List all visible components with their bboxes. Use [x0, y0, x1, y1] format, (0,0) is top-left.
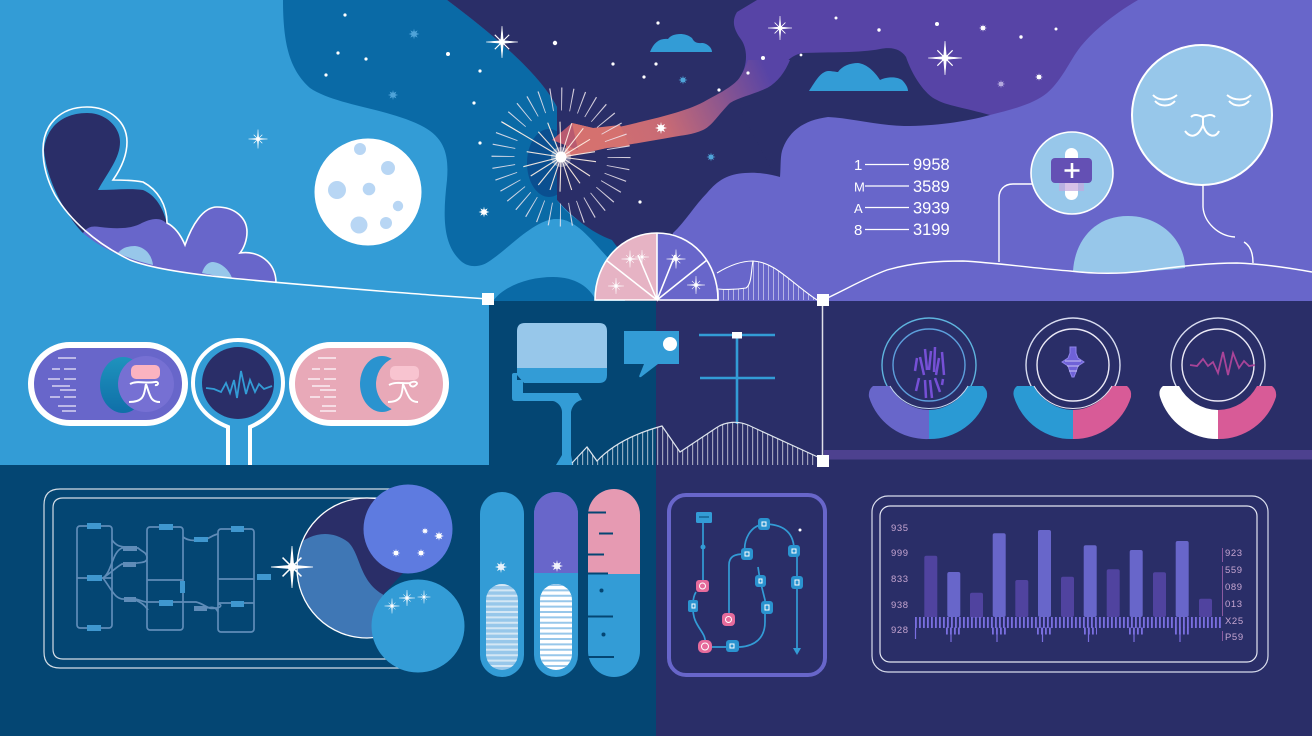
circle: sky blue [372, 580, 464, 672]
frame: chart inner [880, 506, 1257, 662]
star: junction [271, 546, 313, 588]
frame: circuit inner [53, 498, 390, 659]
axis labels: left [891, 523, 909, 636]
moon [314, 138, 422, 246]
meter: purple capsule [534, 492, 578, 677]
frame: chart outer [872, 496, 1268, 672]
wave line: right [823, 261, 1312, 300]
face circle with connector [1132, 45, 1272, 263]
axis labels: right: 923 [1225, 548, 1243, 559]
frame: flow diagram [669, 495, 825, 675]
divider strip [824, 450, 1312, 460]
panel: middle row navy [656, 301, 1312, 465]
panel: light blue hill [470, 219, 625, 301]
panel: bottom left [0, 465, 656, 736]
axis labels: right: 089 [1225, 582, 1243, 593]
chart: mountain area [572, 422, 822, 463]
axis labels: right: X25 [1225, 616, 1244, 627]
stars: sparkles [75, 16, 1043, 217]
dial: people [869, 318, 987, 439]
pie chart [595, 233, 718, 300]
data list: values: 1 [854, 157, 862, 174]
data list: values [854, 156, 950, 239]
pill: pink toggle [292, 345, 446, 423]
data list: values: 8 [854, 222, 862, 239]
data list: values: 9958 [913, 156, 950, 174]
panel: teal sky blob [283, 0, 625, 266]
left cloud blob [43, 107, 276, 283]
data list: values: 3199 [913, 221, 950, 239]
ribbon: comet trail [563, 60, 790, 158]
pill: purple toggle [31, 345, 185, 423]
panel: middle row left [0, 301, 489, 465]
diagram: circuit [77, 523, 271, 632]
panel: bottom right [656, 465, 1312, 736]
axis labels: right: 559 [1225, 565, 1243, 576]
gauge: pulse circle [193, 340, 283, 465]
icon: t-bar marker [699, 332, 775, 424]
node squares [482, 293, 829, 467]
axis labels: left: 999 [891, 548, 909, 559]
data list: values: 3589 [913, 178, 950, 196]
data list: values: A [854, 201, 863, 216]
dial: spinning top [1013, 318, 1131, 439]
panel: light purple hills [660, 0, 1312, 301]
axis labels: left: 833 [891, 574, 909, 585]
meter: blue capsule [480, 492, 524, 677]
panel: middle row centre dark [489, 301, 656, 465]
frame: vertical connector line [822, 300, 824, 461]
circle: periwinkle [364, 484, 452, 574]
hatched hill [717, 261, 818, 300]
axis labels: left: 928 [891, 625, 909, 636]
starfield: dots [324, 13, 1057, 204]
axis labels: right: 013 [1225, 599, 1243, 610]
bar chart [915, 530, 1222, 642]
icon: firework burst [502, 99, 630, 215]
icon: speech bubble [624, 331, 679, 377]
dome: teal hill [493, 277, 596, 301]
frame: circuit outer [44, 489, 405, 668]
icon: speech roller [512, 323, 607, 465]
data list: values: 3939 [913, 200, 950, 218]
icon: small cloud [650, 34, 712, 52]
medical circle with connector [999, 132, 1113, 262]
icon: large cloud [809, 63, 908, 91]
panel: deep purple sky [734, 0, 1140, 120]
axis labels: left: 935 [891, 523, 909, 534]
panel: navy upper sky [447, 0, 820, 301]
dome: light blue [1073, 216, 1185, 272]
data list: values: M [854, 180, 865, 194]
axis labels: right: P59 [1225, 632, 1244, 643]
panel: top left sky [0, 0, 620, 301]
dial: waveform [1159, 318, 1276, 439]
diagram: flow path [688, 512, 803, 655]
axis labels: right [1222, 548, 1244, 643]
big yin-yang circle [296, 497, 403, 639]
meter: pink ruler capsule [588, 489, 640, 677]
wave line: left [130, 260, 488, 299]
axis labels: left: 938 [891, 600, 909, 611]
